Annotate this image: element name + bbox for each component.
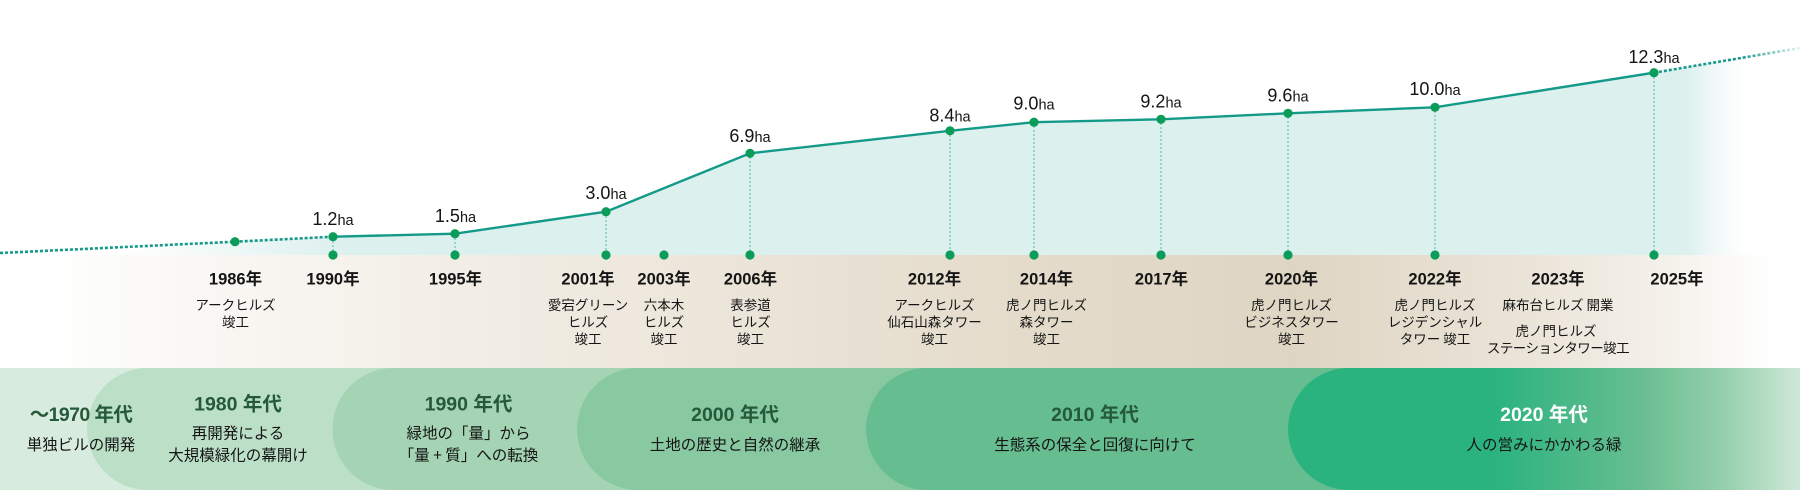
decade text: up to 1970s <box>27 403 136 455</box>
hectare value labels: 6.9ha <box>729 126 772 146</box>
hectare value labels: 1.5ha <box>435 206 477 226</box>
building completion descriptions: ステーションタワー竣工 <box>1487 337 1629 357</box>
building completion descriptions: 六本木 <box>644 294 685 314</box>
building completion descriptions: 森タワー <box>1020 311 1074 331</box>
building completion descriptions: 仙石山森タワー <box>887 311 982 331</box>
hectare value labels: 9.2ha <box>1140 92 1183 112</box>
hectare value labels: 9.0ha <box>1013 94 1056 114</box>
decade text: up to 1970s: ～1970 年代 <box>30 403 133 426</box>
line chart: green area growth <box>0 48 1800 260</box>
building completion descriptions: ヒルズ <box>644 311 684 331</box>
year labels: 2001年 <box>561 268 615 288</box>
hectare value labels: 8.4ha <box>929 106 972 126</box>
area chart fill <box>0 48 1800 255</box>
year labels: 2023年 <box>1531 268 1585 288</box>
building completion descriptions: 愛宕グリーン <box>548 294 628 314</box>
building completion descriptions: 竣工 <box>737 328 764 348</box>
building completion descriptions: ビジネスタワー <box>1244 311 1339 331</box>
building completion descriptions: タワー 竣工 <box>1400 328 1470 348</box>
decade text: 2000s: 土地の歴史と自然の継承 <box>650 433 821 455</box>
year labels: 2017年 <box>1135 268 1188 288</box>
year labels: 2003年 <box>637 268 691 288</box>
beige timeline band <box>0 255 1800 368</box>
decade text: 1980s: 大規模緑化の幕開け <box>168 444 308 466</box>
building completion descriptions: 竣工 <box>921 328 948 348</box>
building completion descriptions: 竣工 <box>574 328 602 348</box>
hectare value labels <box>312 47 1681 229</box>
vertical drop lines <box>333 73 1654 255</box>
decade text: 1990s: 「量 + 質」への転換 <box>399 444 538 466</box>
building completion descriptions: 虎ノ門ヒルズ <box>1516 320 1596 340</box>
decade text: 1980s: 再開発による <box>192 422 284 444</box>
year labels: 2012年 <box>908 268 961 288</box>
decade text: 2020s <box>1466 403 1622 455</box>
building completion descriptions: 表参道 <box>730 294 771 314</box>
year labels: 1986年 <box>209 268 262 288</box>
decade text: 2010s: 生態系の保全と回復に向けて <box>994 433 1196 455</box>
solid growth line <box>333 73 1654 237</box>
decade text: up to 1970s: 単独ビルの開発 <box>27 433 136 455</box>
timeline dots <box>328 250 1659 260</box>
decade text: 2000s: 2000 年代 <box>691 403 779 426</box>
building completion descriptions: アークヒルズ <box>195 294 276 314</box>
data points <box>230 68 1659 246</box>
building completion descriptions: ヒルズ <box>730 311 771 331</box>
decade text: 1980s: 1980 年代 <box>194 392 282 416</box>
hectare value labels: 12.3ha <box>1628 47 1681 67</box>
hectare value labels: 9.6ha <box>1267 86 1310 106</box>
year labels <box>209 268 1704 288</box>
hectare value labels: 1.2ha <box>312 209 355 229</box>
decade text: 2020s: 2020 年代 <box>1500 403 1588 426</box>
decade text: 2010s <box>994 403 1196 455</box>
decade text: 2010s: 2010 年代 <box>1051 403 1139 426</box>
building completion descriptions: 竣工 <box>1278 328 1305 348</box>
decade text: 1990s <box>399 392 538 466</box>
building completion descriptions: 虎ノ門ヒルズ <box>1006 294 1087 314</box>
dotted trend line past <box>0 237 333 253</box>
building completion descriptions: アークヒルズ <box>894 294 975 314</box>
building completion descriptions: 竣工 <box>1033 328 1060 348</box>
decade text: 1990s: 1990 年代 <box>425 392 513 416</box>
hectare value labels: 10.0ha <box>1409 79 1462 99</box>
year labels: 1990年 <box>306 268 360 288</box>
decade text: 2000s <box>650 403 821 455</box>
dotted trend line future <box>1654 48 1800 73</box>
decade text: 2020s: 人の営みにかかわる緑 <box>1466 433 1622 455</box>
building completion descriptions: レジデンシャル <box>1388 311 1482 331</box>
year labels: 2006年 <box>724 268 777 288</box>
building completion descriptions: 竣工 <box>222 311 249 331</box>
building completion descriptions <box>195 294 1629 357</box>
building completion descriptions: 麻布台ヒルズ 開業 <box>1502 294 1614 314</box>
decade text: 1980s <box>168 392 308 466</box>
year labels: 2020年 <box>1265 268 1318 288</box>
year labels: 2025年 <box>1650 268 1704 288</box>
year labels: 1995年 <box>429 268 482 288</box>
building completion descriptions: 虎ノ門ヒルズ <box>1251 294 1332 314</box>
year labels: 2022年 <box>1408 268 1462 288</box>
building completion descriptions: 竣工 <box>650 328 678 348</box>
decade band shapes <box>0 368 1800 490</box>
decade text: 1990s: 緑地の「量」から <box>406 422 531 444</box>
hectare value labels: 3.0ha <box>585 183 628 203</box>
year labels: 2014年 <box>1020 268 1073 288</box>
building completion descriptions: 虎ノ門ヒルズ <box>1394 294 1476 314</box>
building completion descriptions: ヒルズ <box>568 311 608 331</box>
